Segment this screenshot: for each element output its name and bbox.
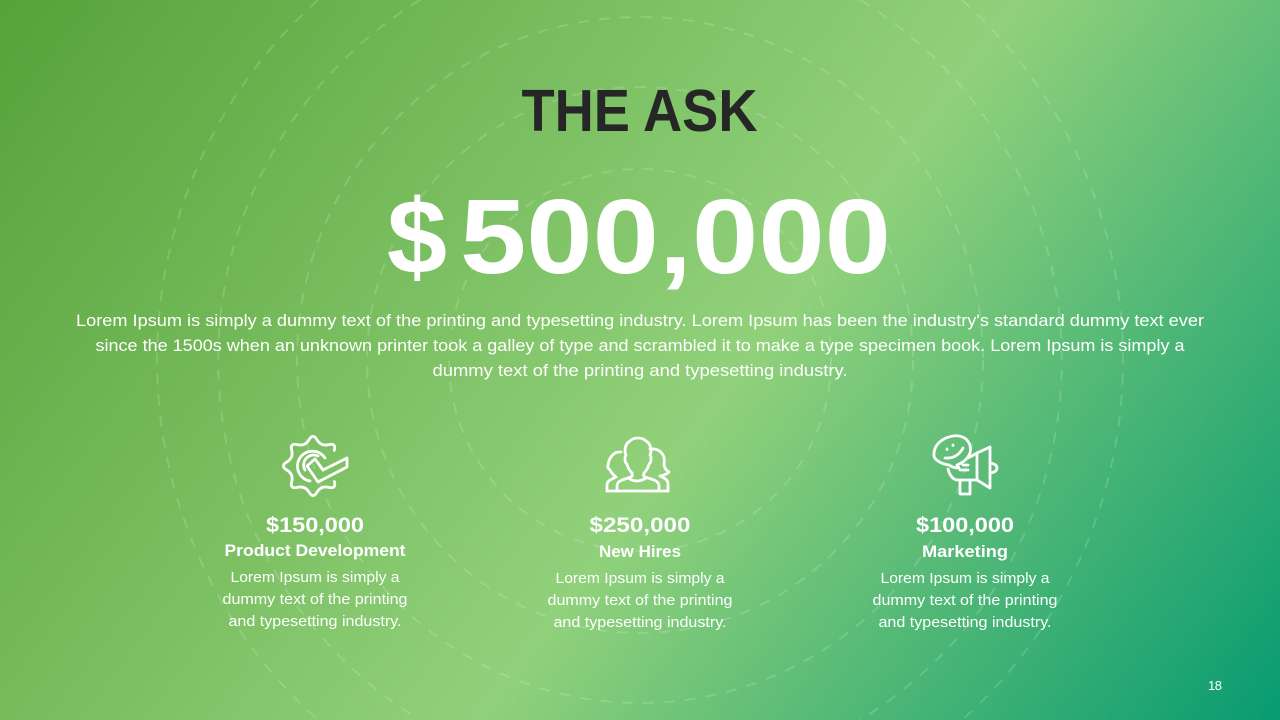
description: dummy text of the printing: [222, 591, 408, 608]
column: new hires: [548, 438, 732, 631]
total amount: $: [387, 178, 447, 296]
description paragraph: dummy text of the printing and typesetting industry.: [432, 361, 848, 380]
description paragraph: Lorem Ipsum is simply a dummy text of the printing and typesetting industry. Lorem Ipsum has been the industry's standard dummy text ever: [76, 311, 1204, 330]
total amount: 500,000: [460, 178, 891, 296]
description: Lorem Ipsum is simply a: [230, 569, 400, 586]
icon: people: [607, 438, 669, 491]
description: [872, 570, 1058, 631]
column: marketing: [872, 436, 1058, 631]
description: Lorem Ipsum is simply a: [556, 570, 725, 587]
amount: $100,000: [916, 514, 1014, 537]
description paragraph: since the 1500s when an unknown printer took a galley of type and scrambled it to make a type specimen book. Lorem Ipsum is simply a: [96, 336, 1185, 355]
description: dummy text of the printing: [872, 592, 1058, 609]
amount: $250,000: [590, 514, 690, 537]
title: THE ASK: [522, 78, 758, 144]
amount: $150,000: [266, 514, 364, 537]
icon: gear with check: [283, 436, 347, 496]
concentric dashed circles: [157, 0, 1123, 720]
description: and typesetting industry.: [878, 614, 1052, 631]
description: and typesetting industry.: [228, 613, 402, 630]
label: Product Development: [224, 541, 406, 560]
description: Lorem Ipsum is simply a: [880, 570, 1050, 587]
page number: 18: [1208, 678, 1222, 693]
description: dummy text of the printing: [548, 592, 732, 609]
description: [548, 570, 732, 631]
description: and typesetting industry.: [554, 614, 726, 631]
icon: megaphone with speech bubble: [934, 436, 997, 494]
description: [222, 569, 408, 630]
label: Marketing: [922, 542, 1008, 561]
label: New Hires: [599, 542, 681, 561]
description paragraph: [76, 311, 1204, 380]
column: product development: [222, 436, 408, 630]
